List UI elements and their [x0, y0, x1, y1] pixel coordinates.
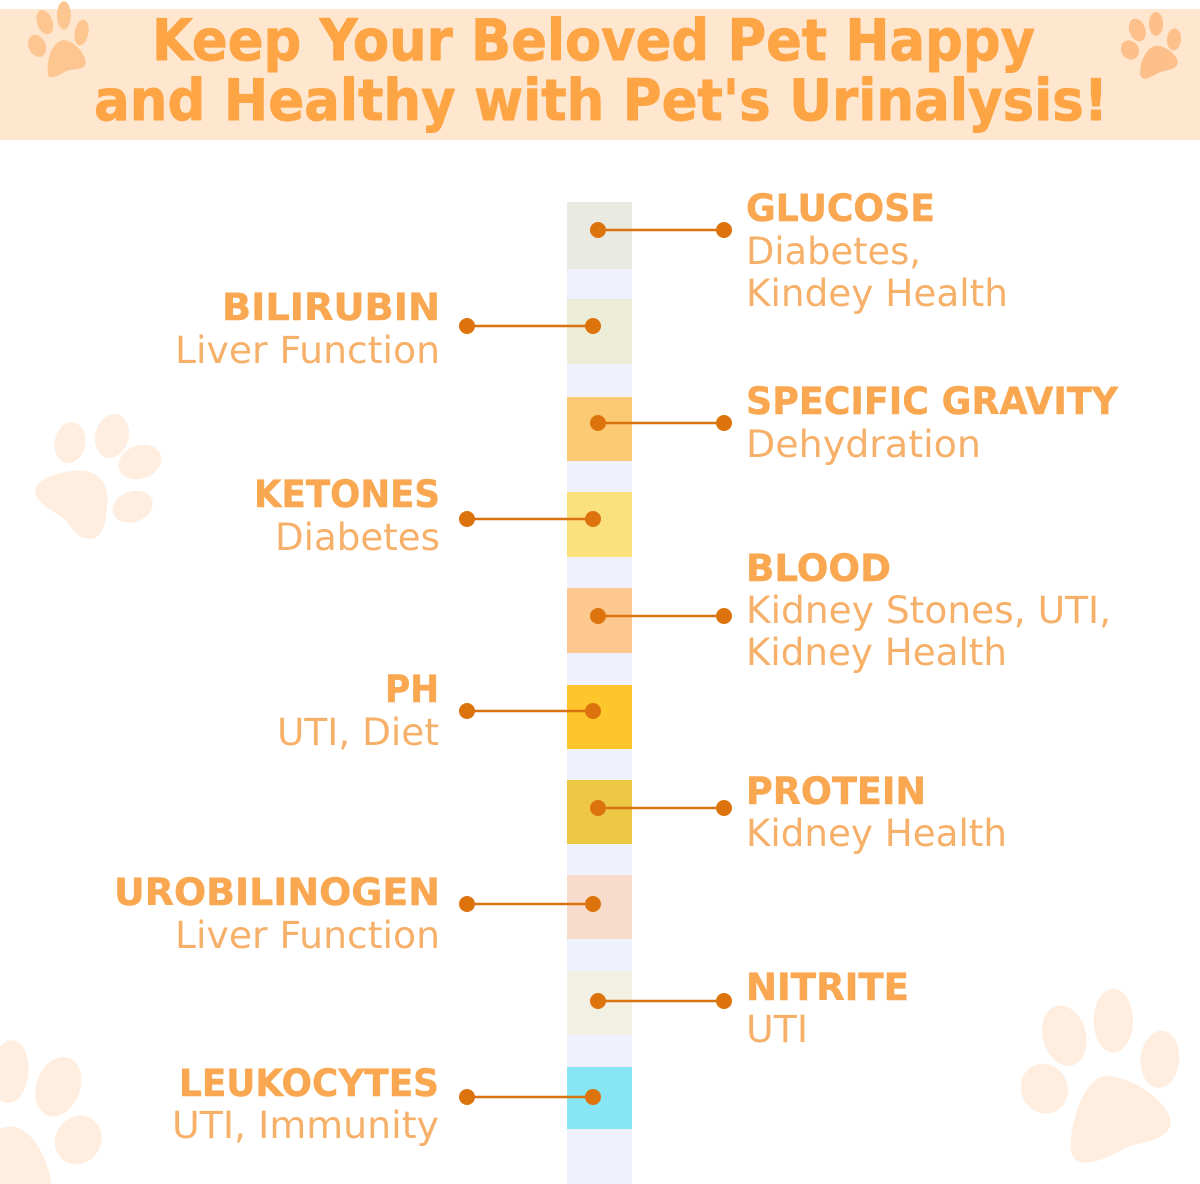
callout: glucose: Kindey Health [746, 271, 1008, 315]
icon: paw bottom right [1012, 989, 1182, 1163]
callout: ph [277, 667, 601, 754]
callout: blood: Kidney Health [746, 630, 1007, 674]
callout: urobilinogen: UROBILINOGEN [114, 870, 440, 914]
callout: leukocytes: UTI, Immunity [172, 1103, 439, 1147]
callout: bilirubin [175, 285, 601, 372]
callout: nitrite: UTI [746, 1007, 808, 1051]
callout: nitrite [590, 965, 909, 1051]
callout: specific gravity: Dehydration [746, 422, 981, 466]
callout: glucose: GLUCOSE [746, 186, 935, 230]
callout: ketones: KETONES [254, 472, 440, 516]
callout: ketones [254, 472, 601, 559]
callout: bilirubin: BILIRUBIN [222, 285, 440, 329]
callout: specific gravity: SPECIFIC GRAVITY [746, 379, 1119, 423]
title: and Healthy with Pet's Urinalysis! [94, 68, 1108, 134]
callout: specific gravity [590, 379, 1119, 466]
callout: glucose: Diabetes, [746, 229, 921, 273]
callout: urobilinogen [114, 870, 601, 957]
callout: blood [590, 546, 1111, 674]
icon: paw middle left [35, 410, 166, 539]
callout: ph: UTI, Diet [277, 710, 439, 754]
callout: bilirubin: Liver Function [175, 328, 440, 372]
callout: protein [590, 769, 1007, 855]
callout: blood: Kidney Stones, UTI, [746, 588, 1111, 632]
title [94, 8, 1108, 134]
callout: blood: BLOOD [746, 546, 891, 590]
callout: glucose [590, 186, 1008, 315]
title banner [0, 8, 1200, 140]
callout: protein: PROTEIN [746, 769, 926, 813]
icon: paw bottom left [0, 1039, 111, 1184]
callout: ketones: Diabetes [275, 515, 440, 559]
callout: leukocytes [172, 1061, 601, 1147]
icon: paw top right [1117, 12, 1182, 79]
callout: nitrite: NITRITE [746, 965, 909, 1009]
icon: paw top left [25, 1, 91, 78]
callout: ph: PH [385, 667, 439, 711]
test strip [567, 202, 632, 1184]
callout: urobilinogen: Liver Function [175, 913, 440, 957]
callout: leukocytes: LEUKOCYTES [179, 1061, 439, 1105]
title: Keep Your Beloved Pet Happy [152, 8, 1035, 74]
callout: protein: Kidney Health [746, 811, 1007, 855]
